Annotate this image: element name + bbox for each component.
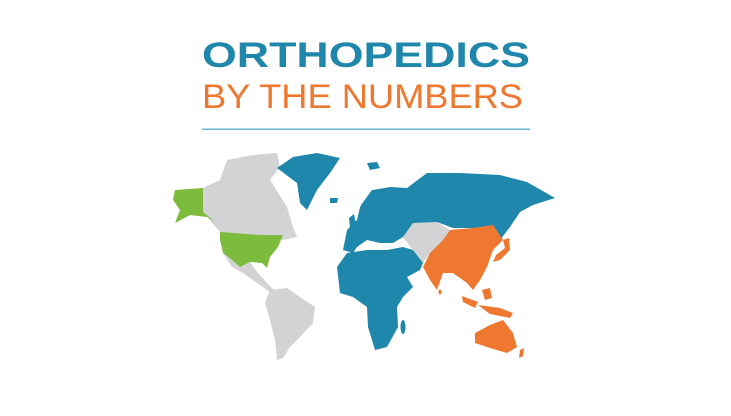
teal regions [277,153,555,350]
grey regions [203,153,450,360]
green: USA and Alaska [173,188,283,268]
divider line [202,128,530,130]
orange regions [423,225,524,358]
world map [173,153,555,360]
subtitle: BY THE NUMBERS [202,78,523,116]
title: ORTHOPEDICS [202,36,530,75]
